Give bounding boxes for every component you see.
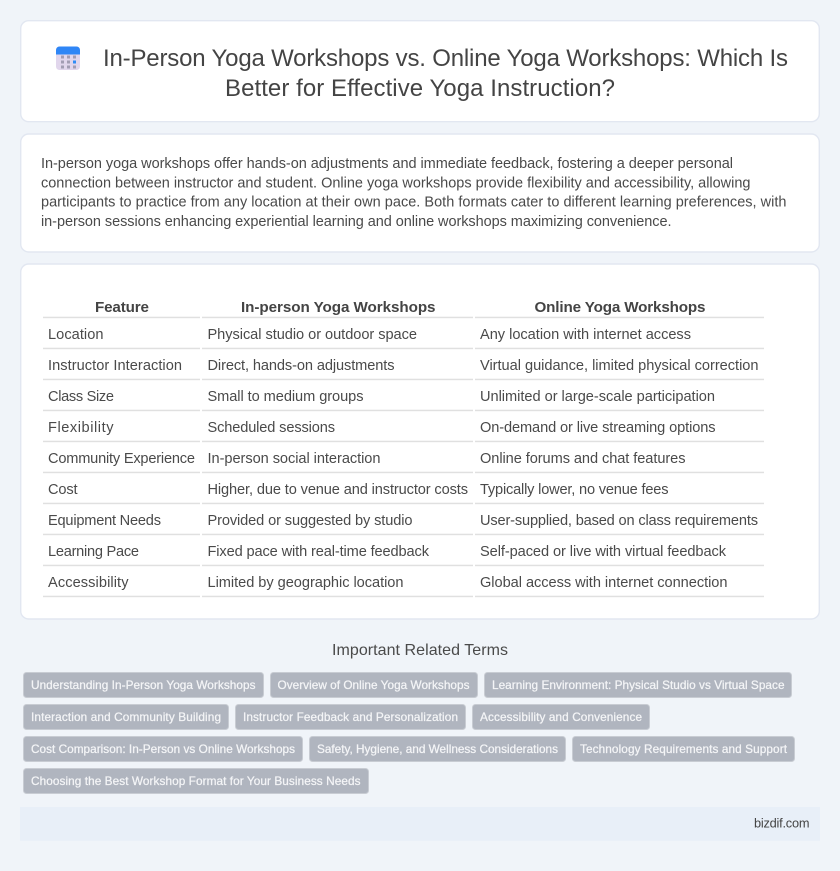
tag: Overview of Online Yoga Workshops [278, 678, 470, 692]
tag [472, 704, 650, 730]
text block: introduction: In-person yoga workshops offer hands-on adjustments and immediate feedback, fostering a deeper personal [41, 156, 733, 172]
row: Cost: Cost [48, 482, 78, 498]
row: Accessibility: Limited by geographic location [208, 575, 404, 591]
row: Equipment Needs: Provided or suggested by studio [208, 513, 412, 529]
table header row: In-person Yoga Workshops [241, 299, 436, 316]
tag: Cost Comparison: In-Person vs Online Workshops [31, 742, 295, 756]
row: Class Size: Small to medium groups [208, 389, 364, 405]
row: Class Size: Class Size [48, 389, 114, 405]
table header row: Online Yoga Workshops [534, 299, 706, 316]
tag: Choosing the Best Workshop Format for Your Business Needs [31, 774, 361, 788]
tag: Understanding In-Person Yoga Workshops [31, 678, 256, 692]
row: Location: Physical studio or outdoor space [208, 327, 417, 343]
row: Accessibility: Global access with internet connection [480, 575, 728, 591]
tag: Accessibility and Convenience [480, 710, 642, 724]
row: Equipment Needs [48, 513, 758, 529]
row: Learning Pace [48, 544, 727, 560]
row: Class Size: Unlimited or large-scale participation [480, 389, 715, 405]
tag [24, 768, 368, 794]
panel: introduction [21, 134, 819, 252]
footer [20, 807, 820, 841]
footer text: bizdif.com: bizdif.com [754, 816, 810, 830]
row: Instructor Interaction: Instructor Interaction [48, 358, 182, 374]
row: Learning Pace: Fixed pace with real-time feedback [208, 544, 430, 560]
tag [484, 672, 792, 698]
table header row: Feature [95, 299, 149, 316]
row: Learning Pace: Self-paced or live with virtual feedback [480, 544, 727, 560]
row: Learning Pace: Learning Pace [48, 544, 139, 560]
row: Accessibility [48, 575, 728, 591]
row: Flexibility: Scheduled sessions [208, 420, 335, 436]
tag [24, 672, 264, 698]
row: Class Size [48, 389, 715, 405]
row: Flexibility: On-demand or live streaming options [480, 420, 716, 436]
row: Location: Any location with internet access [480, 327, 691, 343]
text block: introduction: in-person sessions enhancing experiential learning and online workshops maximizing convenience. [41, 214, 672, 230]
row: Location: Location [48, 327, 104, 343]
tag: Technology Requirements and Support [580, 742, 788, 756]
tag [310, 736, 566, 762]
row: Cost: Higher, due to venue and instructor costs [208, 482, 468, 498]
tag [24, 736, 302, 762]
icon: calendar [56, 46, 80, 70]
row: Accessibility: Accessibility [48, 575, 129, 591]
row: Instructor Interaction [48, 358, 758, 374]
panel: title header [21, 21, 819, 122]
tag [236, 704, 466, 730]
table header row [95, 299, 706, 316]
row: Flexibility [48, 420, 716, 436]
row: Equipment Needs: User-supplied, based on class requirements [480, 513, 758, 529]
row: Instructor Interaction: Virtual guidance, limited physical correction [480, 358, 758, 374]
panel: related term tags [24, 672, 794, 794]
title: Better for Effective Yoga Instruction? [225, 75, 615, 102]
row: Community Experience [48, 451, 686, 467]
row: Community Experience: Community Experience [48, 451, 195, 467]
tag: Interaction and Community Building [31, 710, 221, 724]
tag [572, 736, 794, 762]
text block: introduction: participants to practice from any location at their own pace. Both formats cater to different learning preferences, with [41, 195, 786, 211]
heading: Important Related Terms: Important Related Terms [332, 642, 508, 659]
tag [24, 704, 228, 730]
text block: introduction: connection between instructor and student. Online yoga workshops provide flexibility and accessibility, allowing [41, 175, 750, 191]
row: Cost: Typically lower, no venue fees [480, 482, 668, 498]
row: Flexibility: Flexibility [48, 420, 114, 436]
row: Community Experience: In-person social interaction [208, 451, 380, 467]
row: Community Experience: Online forums and chat features [480, 451, 686, 467]
title: In-Person Yoga Workshops vs. Online Yoga Workshops: Which Is [103, 45, 788, 72]
panel: comparison table [21, 264, 819, 619]
tag [270, 672, 478, 698]
row: Equipment Needs: Equipment Needs [48, 513, 161, 529]
tag: Learning Environment: Physical Studio vs Virtual Space [492, 678, 785, 692]
row: Instructor Interaction: Direct, hands-on adjustments [208, 358, 394, 374]
tag: Safety, Hygiene, and Wellness Considerations [317, 742, 558, 756]
row: Location [48, 327, 691, 343]
tag: Instructor Feedback and Personalization [243, 710, 458, 724]
row: Cost [48, 482, 668, 498]
